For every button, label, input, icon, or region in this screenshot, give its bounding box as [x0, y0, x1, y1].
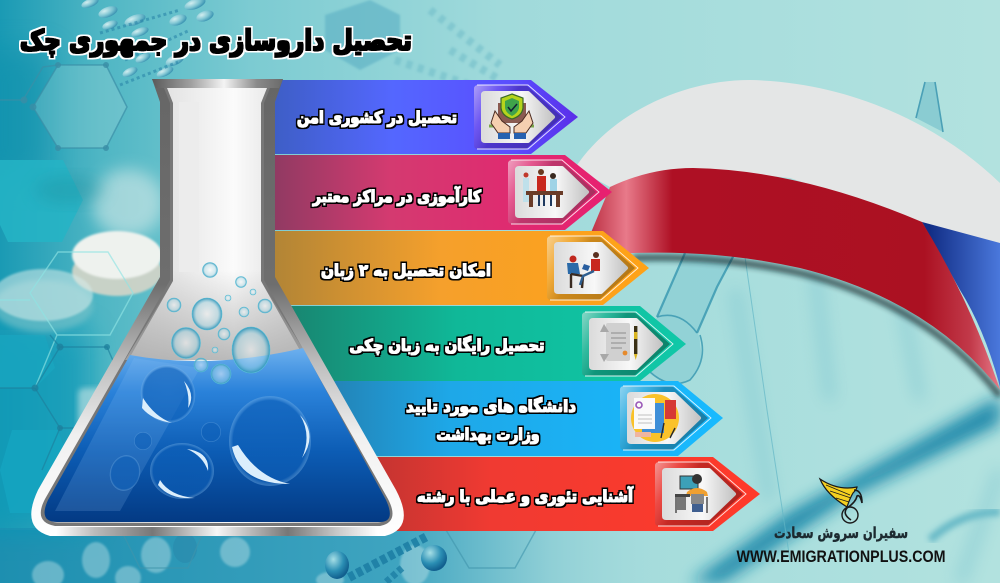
- label: approved universities: [406, 396, 576, 445]
- background hexagons: [0, 62, 127, 513]
- banner: theory and practice: [270, 457, 760, 531]
- company name: سفیران سروش سعادت: [774, 524, 908, 542]
- icon: phoenix: [820, 479, 862, 523]
- title: تحصیل داروسازی در جمهوری چک: [20, 24, 412, 57]
- label: approved universities: وزارت بهداشت: [436, 425, 540, 445]
- label: free education in Czech: تحصیل رایگان به زبان چکی: [350, 335, 544, 356]
- flask glass: [41, 88, 392, 526]
- DNA strands: [80, 0, 215, 85]
- background pills: [0, 169, 164, 428]
- bubbles: [167, 262, 272, 384]
- label: two languages: امکان تحصیل به ۲ زبان: [321, 261, 491, 280]
- test tube: [646, 253, 735, 384]
- large bubbles in liquid: [106, 358, 311, 499]
- flask outline: [31, 79, 404, 536]
- icon plate: two people talking: [547, 236, 638, 300]
- banner: two languages: [270, 231, 649, 305]
- icon plate: team at table: [508, 160, 599, 224]
- banner: approved universities: [270, 381, 723, 456]
- flag ribbon: [575, 80, 1000, 396]
- liquid: [45, 348, 390, 522]
- right background streaks: [690, 82, 1000, 583]
- bottom beads: [32, 530, 536, 583]
- label: internship: کارآموزی در مراکز معتبر: [312, 185, 481, 207]
- flask: [31, 79, 404, 536]
- website: WWW.EMIGRATIONPLUS.COM: [736, 548, 946, 566]
- icon plate: documents on yellow circle: [620, 386, 711, 450]
- label: theory and practice: آشنایی تئوری و عملی با رشته: [417, 485, 633, 507]
- banner: safe country: [270, 80, 578, 154]
- icon plate: document and pen: [582, 312, 673, 376]
- banner: free education in Czech: [270, 306, 686, 381]
- label: approved universities: دانشگاه های مورد تایید: [406, 396, 576, 417]
- banner: internship: [270, 155, 612, 230]
- logo: [736, 479, 946, 566]
- icon plate: person at desk: [655, 462, 746, 526]
- icon plate: shield and hands: [474, 85, 565, 149]
- label: safe country: تحصیل در کشوری امن: [297, 108, 457, 128]
